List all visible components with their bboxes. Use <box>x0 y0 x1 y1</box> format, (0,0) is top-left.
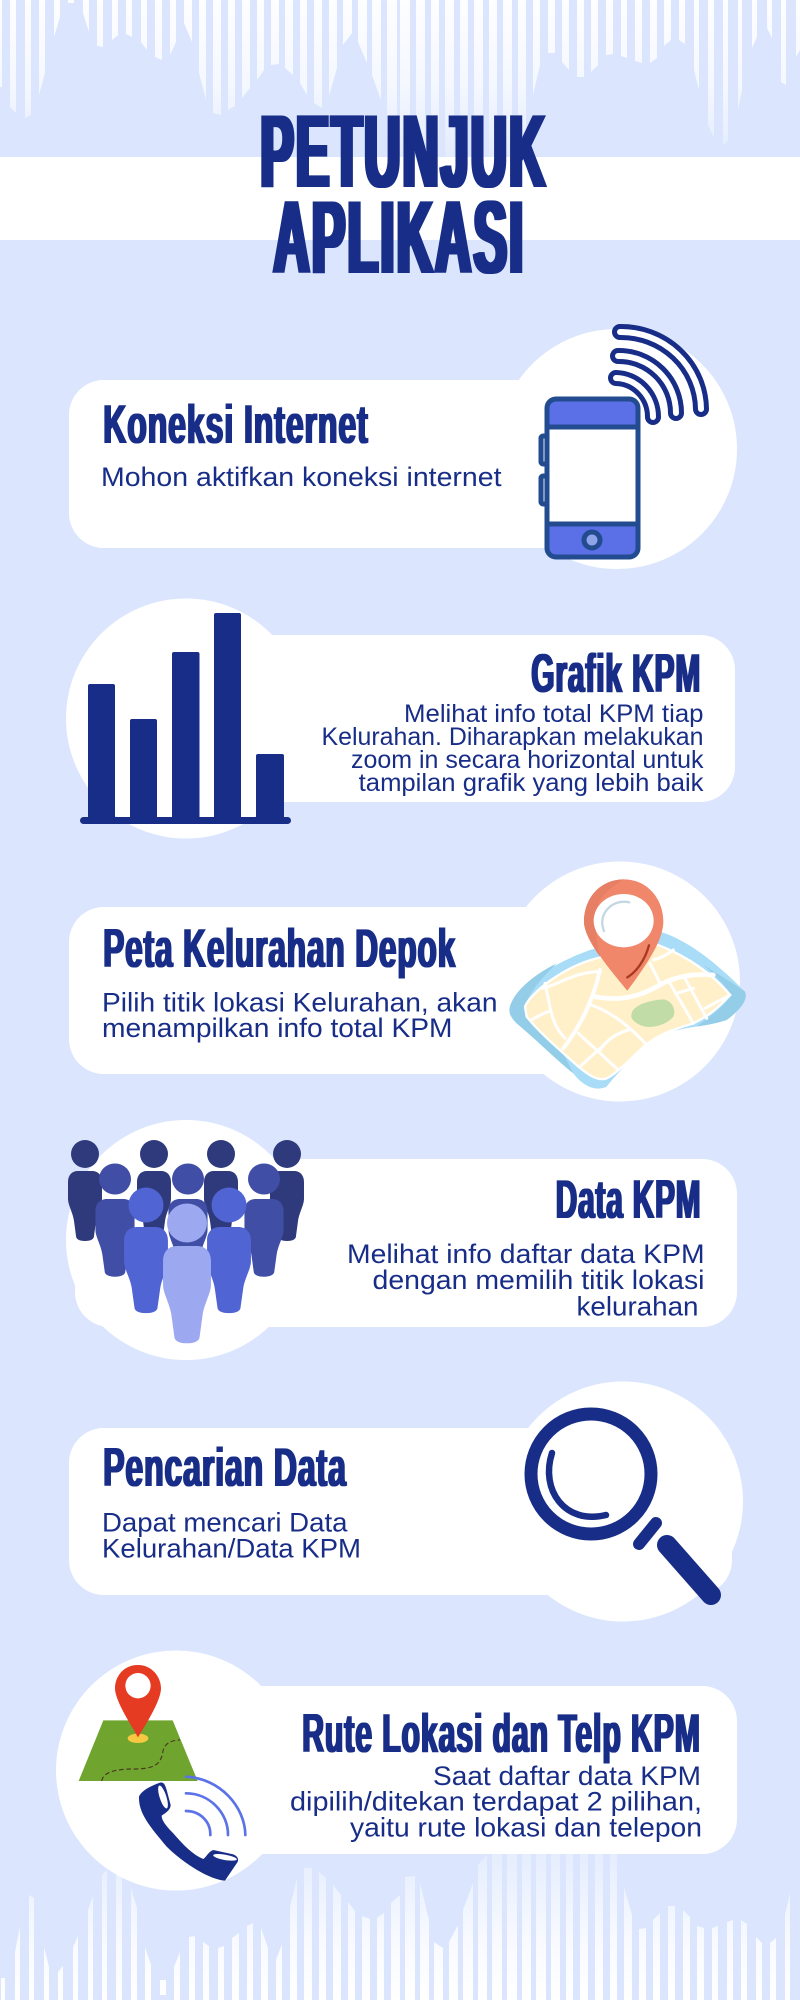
description: dipilih/ditekan terdapat 2 pilihan, <box>290 1787 702 1817</box>
heading: Pencarian Data <box>103 1436 347 1498</box>
card background <box>56 1650 737 1890</box>
panel: pencarian data <box>69 1382 743 1622</box>
card background <box>69 1382 743 1622</box>
card background <box>69 329 737 569</box>
panel: peta kelurahan depok <box>69 862 746 1102</box>
description: Pilih titik lokasi Kelurahan, akan <box>102 988 498 1018</box>
top waveform decoration <box>0 0 800 157</box>
description: Melihat info daftar data KPM <box>347 1239 705 1269</box>
bottom waveform decoration <box>1 1854 790 2000</box>
description <box>102 1508 361 1564</box>
heading: Peta Kelurahan Depok <box>103 917 456 979</box>
description: menampilkan info total KPM <box>102 1013 452 1043</box>
icon: city map with pin <box>509 879 746 1089</box>
description <box>102 988 498 1043</box>
card background <box>66 1120 737 1360</box>
description: yaitu rute lokasi dan telepon <box>350 1813 702 1843</box>
panel: grafik kpm <box>66 598 735 838</box>
icon: bar chart <box>80 613 291 824</box>
icon: magnifying glass <box>531 1414 711 1595</box>
description: zoom in secara horizontal untuk <box>351 746 704 774</box>
panel: koneksi internet <box>69 329 737 569</box>
description: Melihat info total KPM tiap <box>404 700 704 728</box>
card background <box>69 862 740 1102</box>
description: Kelurahan/Data KPM <box>102 1534 361 1564</box>
white title band <box>0 157 800 240</box>
description: tampilan grafik yang lebih baik <box>359 769 704 797</box>
description: kelurahan <box>576 1292 698 1322</box>
panel: rute lokasi dan telp kpm <box>56 1650 737 1890</box>
icon: crowd of people <box>68 1140 304 1343</box>
description: Saat daftar data KPM <box>433 1761 701 1791</box>
description: Kelurahan. Diharapkan melakukan <box>322 723 704 751</box>
description <box>290 1761 702 1843</box>
icon: smartphone with signal <box>541 332 701 557</box>
description <box>322 700 704 797</box>
title <box>260 94 548 296</box>
description: Dapat mencari Data <box>102 1508 348 1538</box>
title: APLIKASI <box>274 180 526 296</box>
panel: data kpm <box>66 1120 737 1360</box>
description: dengan memilih titik lokasi <box>372 1265 704 1295</box>
description <box>347 1239 705 1322</box>
card background <box>66 598 735 838</box>
description: Mohon aktifkan koneksi internet <box>101 462 502 492</box>
icon: route map and telephone <box>79 1665 245 1881</box>
heading: Koneksi Internet <box>103 393 369 455</box>
